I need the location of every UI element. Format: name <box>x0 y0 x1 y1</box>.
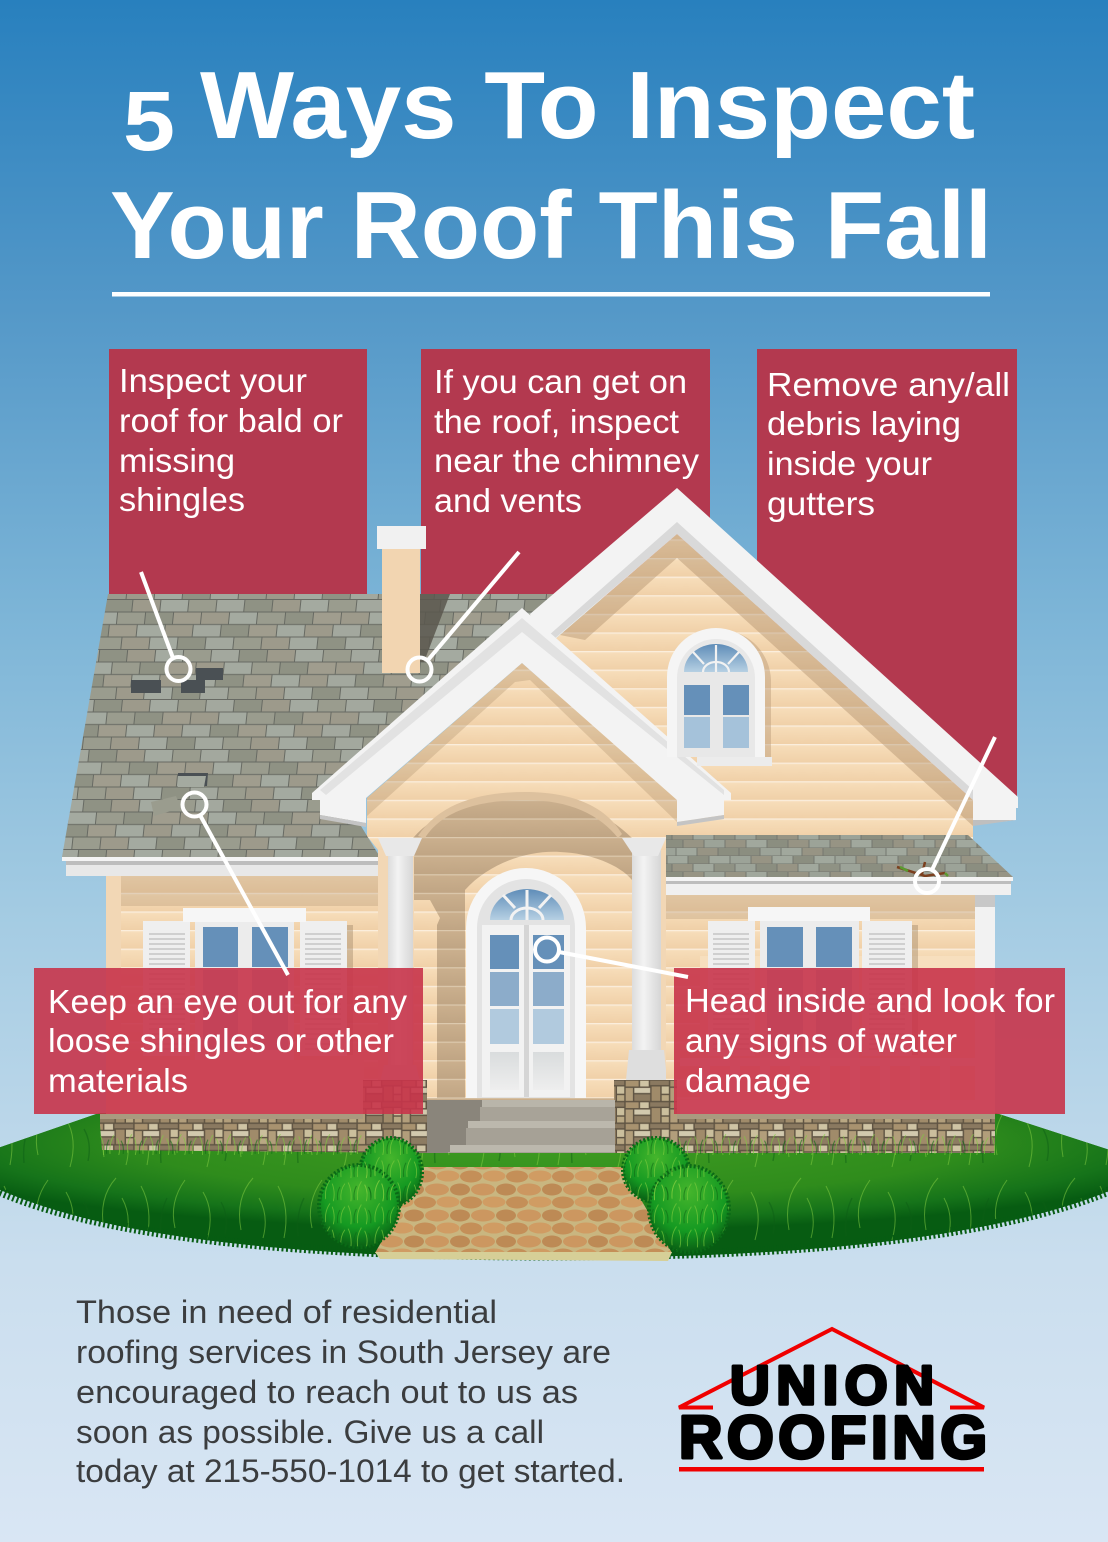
lawn back <box>0 1113 1108 1258</box>
title underline <box>112 292 990 296</box>
title: Ways To Inspect <box>200 52 975 159</box>
closing paragraph: Those in need of residential <box>76 1294 497 1330</box>
callout box: chimney and vents <box>421 349 710 599</box>
porch recess <box>413 797 632 1100</box>
porch arch trim <box>418 792 622 838</box>
house <box>62 488 1018 1167</box>
logo wordmark <box>679 1354 987 1471</box>
closing paragraph: soon as possible. Give us a call <box>76 1414 544 1450</box>
callout box: chimney and vents: and vents <box>434 482 582 519</box>
debris in gutter <box>897 862 948 876</box>
lower right wall <box>666 878 975 1116</box>
right eave <box>666 877 1013 895</box>
callout box: loose shingles <box>34 968 423 1114</box>
title <box>110 52 992 279</box>
callout box: gutters: gutters <box>767 485 875 522</box>
stone foundation left <box>100 1114 365 1155</box>
callout box: loose shingles: materials <box>48 1062 188 1099</box>
callout box: bald or missing shingles <box>109 349 367 599</box>
title: Your Roof This Fall <box>110 172 992 279</box>
left eave <box>62 857 378 876</box>
title: 5 <box>123 74 175 168</box>
small gable trim <box>312 608 731 827</box>
chimney <box>382 548 420 673</box>
callout box: gutters: inside your <box>767 445 932 482</box>
lower right roof <box>666 835 1013 877</box>
callout box: water damage: any signs of water <box>685 1022 957 1059</box>
cobblestone path <box>375 1167 672 1261</box>
lawn front <box>0 1113 1108 1260</box>
pointer: water damage <box>535 938 688 977</box>
chimney shadow <box>420 594 450 662</box>
left column <box>378 838 422 1082</box>
closing paragraph <box>76 1294 625 1489</box>
closing paragraph: encouraged to reach out to us as <box>76 1374 578 1410</box>
porch railing <box>680 1058 975 1115</box>
logo roof line <box>679 1329 984 1408</box>
stone foundation right <box>677 1114 995 1155</box>
lower left wall <box>106 876 378 1116</box>
small gable wall <box>367 663 677 850</box>
callout box: chimney and vents: near the chimney <box>434 442 700 479</box>
callout box: bald or missing shingles: shingles <box>119 481 245 518</box>
callout box: gutters: Remove any/all <box>767 366 1010 403</box>
logo wordmark: UNION <box>730 1354 934 1416</box>
bushes right <box>623 1138 729 1252</box>
callout box: bald or missing shingles: Inspect your <box>119 362 307 399</box>
chimney cap <box>377 526 426 549</box>
lawn jagged edge <box>0 1188 1108 1256</box>
upper window <box>667 628 772 766</box>
closing paragraph: roofing services in South Jersey are <box>76 1334 611 1370</box>
callout box: bald or missing shingles: roof for bald or <box>119 402 343 439</box>
callout box: water damage: damage <box>685 1062 811 1099</box>
callout box: loose shingles: loose shingles or other <box>48 1022 394 1059</box>
right lower window <box>708 907 918 1059</box>
steps <box>427 1100 615 1167</box>
door <box>466 868 592 1098</box>
large gable trim <box>530 488 1018 826</box>
callout box: bald or missing shingles: missing <box>119 442 235 479</box>
callout box: loose shingles: Keep an eye out for any <box>48 983 408 1020</box>
porch post <box>975 895 995 1120</box>
callout box: chimney and vents: the roof, inspect <box>434 403 679 440</box>
pointer: missing shingles <box>141 572 190 681</box>
loose shingles <box>151 773 208 816</box>
logo wordmark: ROOFING <box>679 1404 987 1471</box>
small gable fascia shadow <box>367 663 677 822</box>
stone pedestal left <box>363 1080 427 1160</box>
callout box: gutters <box>757 349 1017 801</box>
closing paragraph: today at 215-550-1014 to get started. <box>76 1453 625 1489</box>
pointer: chimney <box>408 552 519 682</box>
logo: Union Roofing <box>679 1329 987 1472</box>
left lower window <box>143 908 353 1060</box>
side wall pieces <box>378 850 668 1100</box>
right column <box>622 838 667 1080</box>
inner arch light wall <box>465 852 632 1098</box>
callout box: water damage <box>674 968 1065 1114</box>
pointer: gutter <box>915 737 995 893</box>
stone pedestal right <box>614 1080 677 1165</box>
missing shingles <box>131 668 223 693</box>
large gable wall <box>540 534 973 860</box>
large gable fascia shadow <box>560 534 973 826</box>
bushes left <box>319 1138 422 1247</box>
callout box: chimney and vents: If you can get on <box>434 363 687 400</box>
callout box: water damage: Head inside and look for <box>685 982 1055 1019</box>
main shingled roof <box>62 594 556 857</box>
pointer: loose shingles <box>182 792 288 975</box>
callout box: gutters: debris laying <box>767 405 961 442</box>
logo underline <box>679 1467 984 1472</box>
light wall left of door <box>413 900 440 1098</box>
